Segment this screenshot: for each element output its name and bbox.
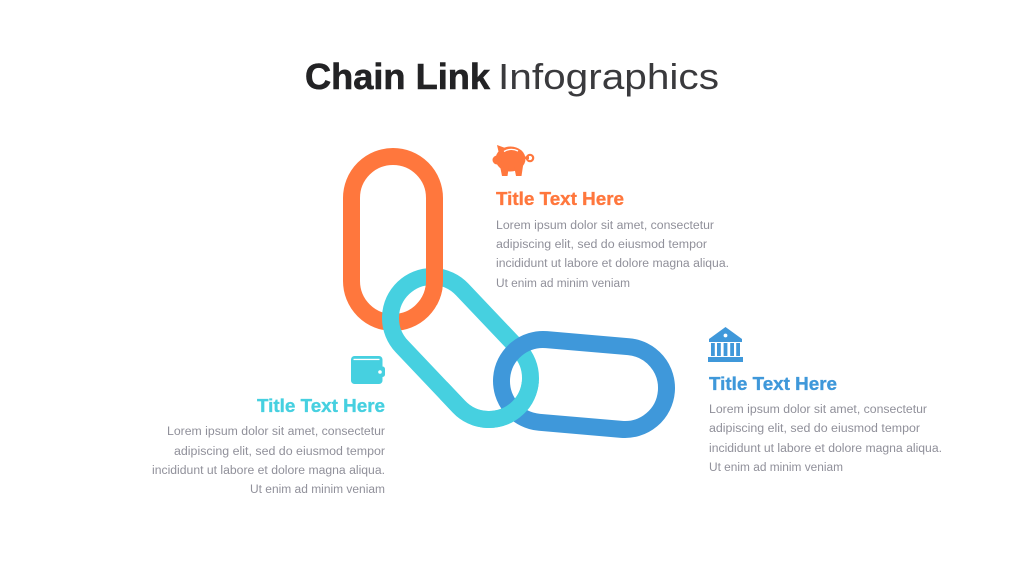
title: Infographics: [498, 56, 719, 97]
panel: teal text: Lorem ipsum dolor sit amet, consectetur: [167, 426, 385, 438]
panel: blue text: adipiscing elit, sed do eiusmod tempor: [709, 423, 920, 435]
title: [305, 56, 719, 97]
panel: teal text: [152, 395, 385, 496]
panel: orange text: [496, 188, 729, 290]
orange link: [352, 156, 434, 322]
panel: teal text: Title Text Here: [257, 395, 385, 416]
teal link overlap: [440, 382, 539, 428]
icon: bank: [708, 327, 743, 362]
panel: blue text: Lorem ipsum dolor sit amet, consectetur: [709, 404, 927, 416]
orange link overlap: [416, 268, 443, 305]
panel: orange text: Title Text Here: [496, 188, 624, 209]
panel: orange text: incididunt ut labore et dolore magna aliqua.: [496, 258, 729, 270]
panel: blue text: Title Text Here: [709, 373, 837, 394]
title: Chain Link: [305, 56, 491, 97]
panel: blue text: incididunt ut labore et dolore magna aliqua.: [709, 443, 942, 455]
blue link: [498, 336, 670, 433]
panel: orange text: adipiscing elit, sed do eiusmod tempor: [496, 239, 707, 251]
panel: blue text: [709, 373, 942, 474]
panel: orange text: Lorem ipsum dolor sit amet, consectetur: [496, 220, 714, 232]
panel: orange text: Ut enim ad minim veniam: [496, 278, 630, 290]
panel: blue text: Ut enim ad minim veniam: [709, 462, 843, 474]
icon: piggy bank: [492, 145, 533, 176]
chain link graphic: [352, 156, 670, 437]
teal link: [373, 259, 548, 437]
panel: teal text: Ut enim ad minim veniam: [250, 484, 385, 496]
panel: teal text: incididunt ut labore et dolore magna aliqua.: [152, 465, 385, 477]
panel: teal text: adipiscing elit, sed do eiusmod tempor: [174, 446, 385, 458]
icon: wallet: [351, 356, 385, 384]
